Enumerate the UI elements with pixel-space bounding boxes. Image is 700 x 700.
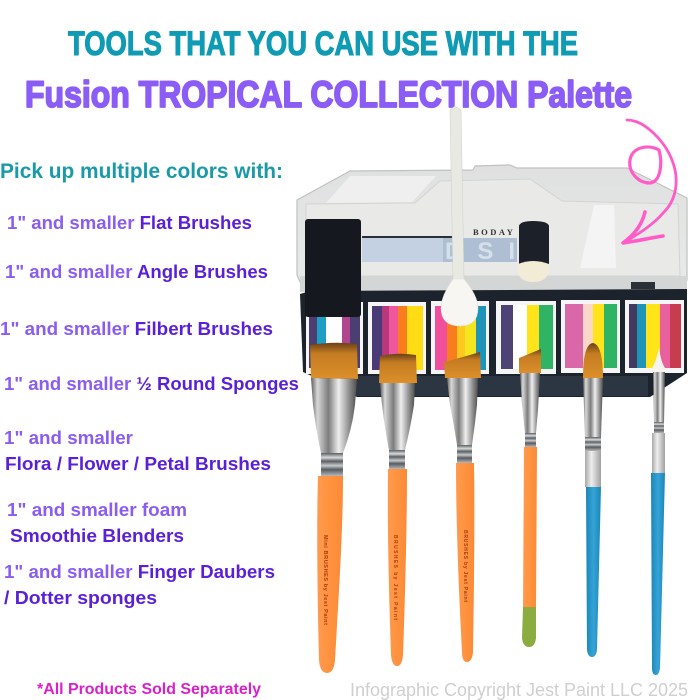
bristles [310, 343, 358, 379]
silver collar [585, 451, 601, 487]
crimp rings [389, 450, 405, 469]
title line 1: TOOLS THAT YOU CAN USE WITH THE [68, 25, 578, 63]
list item: finger daubers and dotter sponges: 1" and smaller Finger Daubers [4, 561, 275, 582]
ferrule [520, 373, 540, 433]
list item: angle brushes: 1" and smaller Angle Brushes [5, 261, 268, 282]
brush 5: round filbert [583, 343, 603, 657]
crimp rings [654, 422, 664, 433]
list item: finger daubers and dotter sponges: / Dotter sponges [4, 587, 157, 608]
list item: foam smoothie blenders: 1" and smaller foam [7, 499, 187, 520]
crimp rings [585, 437, 601, 451]
ferrule [583, 378, 603, 437]
ferrule [447, 378, 478, 445]
crimp rings [525, 433, 536, 447]
bristles [379, 354, 417, 383]
brush 2: angle [379, 354, 417, 666]
pan 3 [431, 301, 489, 374]
brush 3: filbert [444, 352, 481, 662]
handle print: Mini BRUSHES by Jest Paint [322, 535, 328, 625]
icon: black foam sponge [305, 219, 361, 317]
handle [456, 463, 474, 662]
footnote: sold separately: *All Products Sold Separately [37, 681, 261, 698]
copyright notice: Infographic Copyright Jest Paint LLC 2025 [350, 680, 688, 700]
lid label band: BODAY [473, 227, 515, 237]
pan 2 [368, 302, 426, 374]
pan 1 [306, 302, 363, 374]
list item: flora flower petal brushes: 1" and smaller [4, 427, 133, 448]
bristles [519, 349, 541, 373]
crimp rings [321, 453, 343, 476]
handle [388, 469, 407, 666]
pan 4 [496, 301, 556, 374]
handle [586, 487, 601, 657]
brush 6: fine round [651, 348, 665, 675]
crimp rings [457, 445, 472, 463]
green tip [522, 607, 536, 647]
heading: pick up multiple colors: Pick up multiple colors with: [0, 160, 283, 183]
handle [651, 473, 665, 675]
brush 1: flat [310, 343, 358, 673]
handle print: BRUSHES by Jest Paint [392, 535, 398, 620]
bristles [583, 343, 603, 378]
pan 5 [561, 300, 620, 373]
handle [317, 476, 343, 673]
list item: flora flower petal brushes: Flora / Flower / Petal Brushes [5, 453, 271, 474]
list item: finger daubers and dotter sponges [4, 561, 275, 608]
icon: finger dauber sponge [518, 221, 549, 282]
lid label band [362, 227, 517, 265]
list item: filbert brushes: 1" and smaller Filbert Brushes [0, 318, 273, 339]
handle [523, 447, 537, 607]
list item: round sponges: 1" and smaller ½ Round Sponges [4, 373, 299, 394]
palette: black base [300, 289, 687, 397]
ferrule [311, 378, 357, 453]
list item: foam smoothie blenders: Smoothie Blenders [10, 525, 184, 546]
list item: foam smoothie blenders [7, 499, 187, 546]
lid label band: DSI [445, 238, 515, 265]
bristles [652, 348, 665, 373]
pan 6 [625, 300, 684, 373]
ferrule [653, 372, 665, 422]
ferrule [380, 383, 415, 450]
handle print: BRUSHES by Jest Paint [462, 530, 468, 602]
bristles [444, 352, 481, 378]
list item: flora flower petal brushes [4, 427, 271, 474]
list item: flat brushes: 1" and smaller Flat Brushes [7, 212, 252, 233]
brush 4: small angle with green tip [519, 349, 541, 647]
palette: clear lid [297, 165, 687, 292]
icon: pink curly arrow [623, 120, 676, 243]
silver collar [652, 433, 665, 473]
icon: round sponge applicator [441, 106, 478, 326]
